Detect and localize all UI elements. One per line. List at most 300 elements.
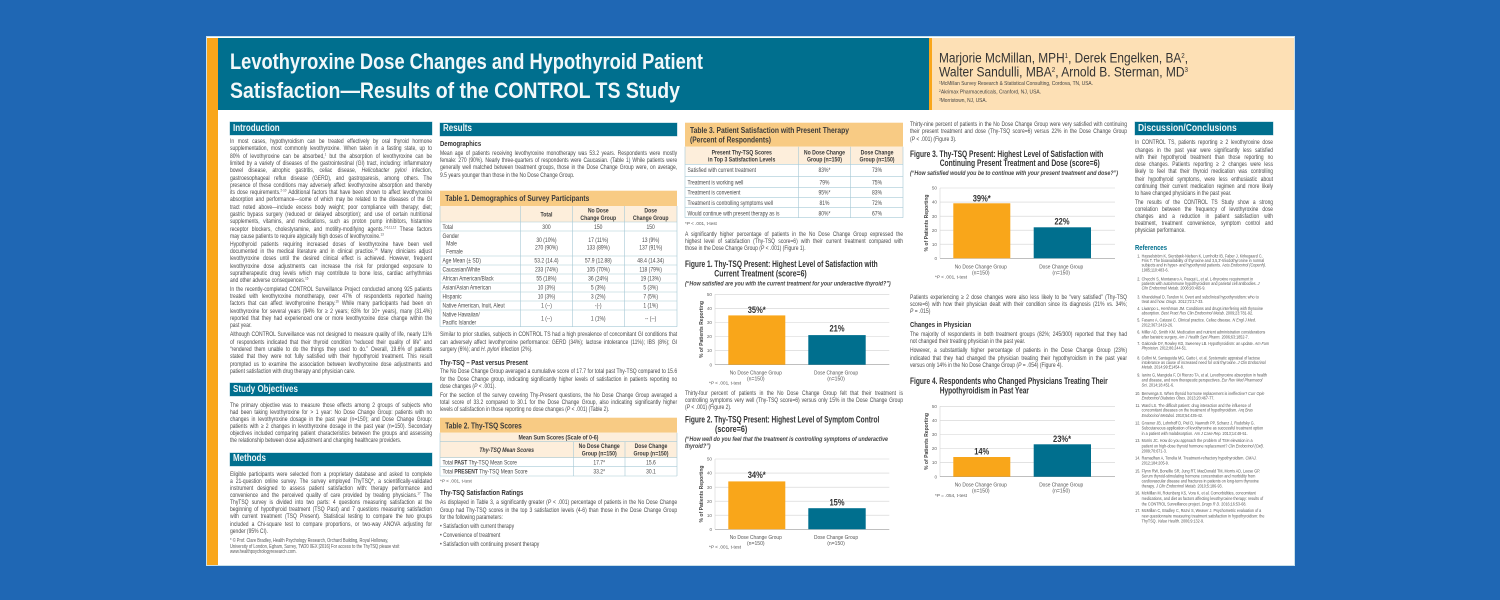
references list: Friis T. The bioavailability of thyroxine and 3,5,3'-triiodothyronine in normal xyxy=(1142,258,1264,263)
text: intro paragraph 1: supplementation, most commonly levothyroxine. When taken in a fasting state, up to xyxy=(230,145,432,152)
references list: 2012;367:2419-26. xyxy=(1142,322,1173,328)
text: intro paragraph 3: factors that can affect levothyroxine therapy.16 While many participants had been on xyxy=(230,300,432,307)
references list: Liwanpo L, Hershman JM. Conditions and drugs interfering with thyroxine xyxy=(1142,306,1264,311)
table 2: Thy-TSQ scores xyxy=(440,418,678,484)
subheading: demographics: Demographics xyxy=(440,139,481,148)
table 1: demographics: Caucasian/White xyxy=(442,267,480,274)
text: satisfaction ratings xyxy=(440,499,677,521)
table 2: Thy-TSQ scores: 30.1 xyxy=(646,469,656,476)
references list: McMillan C, Bradley C, Razvi S, Weaver J. Psychometric evaluation of a xyxy=(1142,508,1262,513)
references list: Miller AD, Smith KM. Medication and nutrient administration considerations xyxy=(1142,329,1265,335)
figure 4: respondents who changed physicians: 0 xyxy=(934,474,937,479)
text: intro paragraph 1: may cause patients to require atypically high doses of levothyroxine.13 xyxy=(230,232,384,240)
authors and affiliations: 3 xyxy=(938,97,940,101)
authors and affiliations: , xyxy=(1184,51,1188,66)
text: present score: For the section of the survey covering Thy-Present questions, the No Dose Change Group averaged a xyxy=(440,392,677,399)
authors and affiliations: 2 xyxy=(1051,67,1055,74)
references list: Khandelwal D, Tandon N. Overt and subclinical hypothyroidism: who to xyxy=(1142,294,1259,300)
text: discussion paragraph 1: to have changed physicians in the past year. xyxy=(1135,190,1231,197)
table 1: demographics: Native Hawaiian/ xyxy=(442,312,480,319)
figure 4: respondents who changed physicians: Hypothyroidism in Past Year xyxy=(940,385,1029,395)
figure 2: highest level of symptom control: 0 xyxy=(709,527,712,532)
references list: 16. xyxy=(1135,490,1140,496)
text: methods: ThyTSQ survey is divided into two parts: 4 questions measuring satisfaction at the xyxy=(230,499,432,506)
text: intro paragraph 1: limited by a variety of diseases of the gastrointestinal (GI) tract, including: inflammatory xyxy=(230,160,432,167)
table 1: demographics: 1 (1%) xyxy=(643,303,658,310)
table 1: demographics: 30 (10%) xyxy=(536,237,557,244)
text: figure 1 lead-in xyxy=(685,231,903,252)
text: past score: for the Dose Change group, indicating significantly higher levels of satisfaction in patients reporting no xyxy=(440,376,677,383)
figure 3: continuing present treatment: No Dose Change Group xyxy=(955,264,1007,270)
header: title banner xyxy=(218,38,928,110)
references list: cardiovascular disease and fractures in patients on long-term thyroxine xyxy=(1142,478,1259,484)
figure 1: highest level of satisfaction: 30 xyxy=(707,320,712,325)
table 1: demographics: Asian/Asian American xyxy=(442,285,491,292)
text: figure 2 lead-in: (P < .001) (Figure 2). xyxy=(685,404,731,411)
text: intro paragraph 1: tract noted above—include excess body weight; poor compliance with therapy; diet; xyxy=(230,204,432,211)
references list: 13. xyxy=(1135,438,1140,443)
text: intro paragraph 3: levothyroxine for several years (94% for ≥ 2 years; 63% for 10+ years), many (31.4%) xyxy=(230,308,432,315)
figure 1: highest level of satisfaction: No Dose Change Group xyxy=(730,371,782,377)
figure 4: respondents who changed physicians: 40 xyxy=(932,418,937,423)
authors and affiliations: , Arnold B. Sterman, MD xyxy=(1055,65,1184,80)
text: demographics xyxy=(440,150,678,179)
subheading: changes in physician: Changes in Physician xyxy=(910,320,971,329)
bullet list: parameters: • Satisfaction with continuing present therapy xyxy=(440,541,539,548)
references list: Fasano A, Catassi C. Clinical practice. Celiac disease. N Engl J Med. xyxy=(1142,317,1256,323)
references list: Cellini M, Santaguida MG, Gatto I, et al. Systematic appraisal of lactose xyxy=(1142,355,1261,361)
text: intro paragraph 3: past year. xyxy=(230,322,252,329)
text: intro paragraph 1: gastric bypass surgery (reduced or delayed absorption); and use of certain nutritional xyxy=(230,211,432,218)
references list: after bariatric surgery. Am J Health Syst Pharm. 2006;63:1852-7. xyxy=(1142,334,1249,340)
text: intro paragraph 4: prompted us to examine the association between levothyroxine dose adjustments and xyxy=(230,361,432,368)
text: discussion paragraph 2: physician performance. xyxy=(1135,227,1186,234)
table 2: Thy-TSQ scores: 15.6 xyxy=(646,460,656,467)
table 3: patient satisfaction: 81% xyxy=(819,201,829,207)
authors and affiliations: 1 xyxy=(938,81,940,85)
authors and affiliations: Morristown, NJ, USA. xyxy=(940,98,986,104)
table 1: demographics xyxy=(440,190,678,327)
text: discussion paragraph 2: The results of the CONTROL TS Study show a strong xyxy=(1135,199,1273,206)
text: discussion paragraph 1: changes in the past year were significantly less satisfied xyxy=(1135,147,1273,154)
table 1: demographics: 105 (70%) xyxy=(587,267,610,274)
text: demographics: Mean age of patients receiving levothyroxine monotherapy was 53.2 years. Respondents were mostly xyxy=(440,150,677,157)
figure 2: highest level of symptom control: Figure 2. Thy-TSQ Present: Highest Level of Symptom Control xyxy=(685,415,879,425)
text: demographics: female: 270 (90%). Nearly three-quarters of respondents were Caucasian. (Table 1) While patients were xyxy=(440,157,677,164)
figure 2: highest level of symptom control: 20 xyxy=(707,499,712,504)
heading: methods xyxy=(230,453,432,466)
text: intro paragraph 1: absorption and performance—some of which may be related to the diseases of the GI xyxy=(230,196,432,203)
text: demographics: generally well matched between treatment groups, those in the Dose Change Group were, on average, xyxy=(440,164,677,171)
footnote: ThyTSQ copyright xyxy=(230,538,400,555)
references list: patients with autoimmune hypothyroidism and parietal cell antibodies. J xyxy=(1142,281,1260,286)
figure 2: highest level of symptom control: *P < .001, t-test xyxy=(709,545,742,550)
heading: discussion/conclusions: Discussion/Conclusions xyxy=(1138,123,1236,134)
figure 3: continuing present treatment: (“How satisfied would you be to continue with your present treatment and dose?”) xyxy=(910,170,1118,177)
text: intro paragraph 2: documented in the medical literature and in clinical practice.14 Many clinicians adjust xyxy=(230,247,432,255)
figure 3: continuing present treatment: 39%* xyxy=(973,193,991,203)
text: physician change difference xyxy=(910,347,1127,369)
text: figure 1 lead-in: those in the Dose Change Group (P < .001) (Figure 1). xyxy=(685,245,806,252)
figure 1: highest level of satisfaction xyxy=(685,259,891,386)
references list: 12. xyxy=(1135,420,1140,426)
table 2: Thy-TSQ scores: 17.7* xyxy=(593,460,606,467)
references list: Morris JC. How do you approach the problem of TSH elevation in a xyxy=(1142,438,1253,443)
figure 1: highest level of satisfaction: 10 xyxy=(707,348,712,353)
table 3: patient satisfaction: *P < .001, t-test xyxy=(685,221,718,226)
text: intro paragraph 3: In the recently-completed CONTROL Surveillance Project conducted among 925 patients xyxy=(230,286,432,293)
heading: study objectives xyxy=(230,383,432,396)
references list xyxy=(1135,243,1269,524)
authors and affiliations: 1 xyxy=(1064,53,1068,60)
table 2: Thy-TSQ scores: Total PAST Thy-TSQ Mean Score xyxy=(442,460,517,467)
table 3: patient satisfaction: 80%* xyxy=(819,211,831,218)
table 1: demographics: 36 (24%) xyxy=(588,276,608,283)
text: objectives: changes in levothyroxine dosage in the past year (n=150); and Dose Change Group: xyxy=(230,416,432,423)
text: concomitant conditions: Similar to prior studies, subjects in CONTROL TS had a high prevalence of concomitant GI conditions that xyxy=(440,331,677,338)
table 3: patient satisfaction: in Top 3 Satisfaction Levels xyxy=(708,157,776,164)
text: figure 3 lead-in: their present treatment and dose (Thy-TSQ score=6) versus 22% in the Dose Change Group xyxy=(910,128,1127,135)
subheading: satisfaction ratings: Thy-TSQ Satisfaction Ratings xyxy=(440,488,523,497)
table 1: demographics: 1 (1%) xyxy=(591,316,606,323)
authors and affiliations: 3 xyxy=(1184,67,1188,74)
authors and affiliations: 2 xyxy=(1181,53,1184,60)
text: intro paragraph 3: treated with levothyroxine monotherapy, over 47% of respondents reported having xyxy=(230,293,432,300)
text: intro paragraph 2: supratherapeutic drug levels which may contribute to bone loss, cardiac arrhythmias xyxy=(230,270,432,277)
figure 2: highest level of symptom control: (“How well do you feel that the treatment is controlling symptoms of underactive xyxy=(685,436,888,443)
title xyxy=(230,49,703,103)
table 1: demographics: Change Group xyxy=(580,215,616,222)
text: physician satisfaction: Patients experiencing ≥ 2 dose changes were also less likely to be “very satisfied” (Thy-TSQ xyxy=(910,294,1127,301)
figure 3: continuing present treatment: 20 xyxy=(932,228,937,233)
figure 2: highest level of symptom control: % of Patients Reporting xyxy=(699,465,705,522)
authors and affiliations xyxy=(938,51,1188,104)
references list: 3. xyxy=(1137,294,1140,300)
table 1: demographics: 10 (3%) xyxy=(538,285,555,292)
table 1: demographics: 5 (3%) xyxy=(591,285,606,292)
text: physician change difference: However, a substantially higher percentage of patients in the Dose Change Group (23%) xyxy=(910,347,1127,354)
heading: results: Results xyxy=(443,123,471,134)
figure 4: respondents who changed physicians: Dose Change Group xyxy=(1039,482,1083,488)
table 1: demographics: Age Mean (± SD) xyxy=(442,258,481,265)
references list: 6. xyxy=(1137,329,1140,335)
table 1: demographics: Hispanic xyxy=(442,294,462,301)
figure 2: highest level of symptom control: Dose Change Group xyxy=(814,535,858,541)
references list: ThyTSQ. Value Health. 2006;9:132-9. xyxy=(1142,518,1204,524)
table 1: demographics: African American/Black xyxy=(442,276,494,283)
authors and affiliations: Marjorie McMillan, MPH xyxy=(938,51,1081,66)
text: discussion paragraph 1: continuing their current medication regimen and more likely xyxy=(1135,183,1273,190)
references list: in a patient with malabsorption. Am J Case Rep. 2013;14:48-51. xyxy=(1142,431,1248,436)
table 1: demographics: 19 (13%) xyxy=(641,276,661,283)
text: intro paragraph 2: levothyroxine dose adjustments can increase the risk for prolonged exposure to xyxy=(230,263,432,270)
table 1: demographics: 3 (2%) xyxy=(591,294,606,301)
table 1: demographics: Dose xyxy=(644,208,658,215)
table 1: demographics: 55 (18%) xyxy=(536,276,557,283)
references list: medications, and diet as factors affecting levothyroxine therapy: results of xyxy=(1142,496,1264,501)
figure 2: highest level of symptom control: 50 xyxy=(707,457,712,462)
text: intro paragraph 4: Although CONTROL Surveillance was not designed to measure quality of life, nearly 11% xyxy=(230,331,432,338)
references list: 4. xyxy=(1137,306,1140,311)
table 1: demographics: 7 (5%) xyxy=(643,294,658,301)
figure 1: highest level of satisfaction: Dose Change Group xyxy=(814,371,858,377)
table 1: demographics: 1 (--) xyxy=(541,316,552,323)
figure 2: highest level of symptom control: (n=150) xyxy=(827,541,845,547)
references list: 9. xyxy=(1137,372,1140,378)
text: intro paragraph 1: gastroesophageal reflux disease (GERD), and gastroparesis, among others. The xyxy=(230,175,432,182)
figure 3: continuing present treatment: 40 xyxy=(932,200,937,205)
table 1: demographics: 270 (90%) xyxy=(535,245,558,252)
text: figure 3 lead-in xyxy=(910,121,1127,143)
footnote: ThyTSQ copyright: www.healthpsychologyresearch.com. xyxy=(230,549,297,555)
table 1: demographics: 13 (9%) xyxy=(642,237,659,244)
figure 2: highest level of symptom control xyxy=(685,415,890,550)
references list: Endocrinol Metabol. 2010;54:435-42. xyxy=(1142,413,1203,418)
heading: introduction: Introduction xyxy=(233,123,279,134)
references list: 17. xyxy=(1135,508,1140,513)
authors and affiliations: Akrimax Pharmaceuticals, Cranford, NJ, USA. xyxy=(940,90,1040,96)
references list: Groener JB, Lohnhoff D, Piel D, Nawroth PP, Schanz J, Rudofsky G. xyxy=(1142,420,1255,426)
table 1: demographics: 150 xyxy=(647,225,655,231)
text: present score: levels of satisfaction in those reporting no dose changes (P < .001) (Table 2). xyxy=(440,406,609,413)
table 1: demographics: 300 xyxy=(542,225,551,231)
table 3: patient satisfaction: 95%* xyxy=(819,190,831,197)
figure 3: continuing present treatment: 22% xyxy=(1054,216,1070,226)
references list: 1. xyxy=(1137,253,1140,259)
text: discussion paragraph 1: their hypothyroid symptoms, were less enthusiastic about xyxy=(1135,176,1273,183)
text: intro paragraph 2: Hypothyroid patients requiring increased doses of levothyroxine have been well xyxy=(230,241,432,248)
figure 1: highest level of satisfaction: 35%* xyxy=(748,305,766,315)
text: concomitant conditions xyxy=(440,331,678,353)
figure 4: respondents who changed physicians: % of Patients Reporting xyxy=(924,413,930,470)
figure 3: continuing present treatment: Continuing Present Treatment and Dose (score=6) xyxy=(940,158,1100,168)
authors and affiliations: Walter Sandulli, MBA xyxy=(938,65,1065,80)
figure 2: highest level of symptom control: 40 xyxy=(707,471,712,476)
references list: Flynn RW, Bonellie SR, Jung RT, MacDonald TM, Morris AD, Leese GP. xyxy=(1142,468,1260,474)
text: figure 1 lead-in: highest level of satisfaction (Thy-TSQ score=6) with their current treatment compared with xyxy=(685,238,903,245)
header: authors panel xyxy=(928,38,1294,110)
table 3: patient satisfaction: Table 3. Patient Satisfaction with Present Therapy xyxy=(690,125,849,135)
references list: 10. xyxy=(1135,391,1140,396)
authors and affiliations: 2 xyxy=(938,89,940,93)
figure 4: respondents who changed physicians: 10 xyxy=(932,460,937,465)
figure 2: highest level of symptom control: 10 xyxy=(707,513,712,518)
figure 1: highest level of satisfaction: (n=150) xyxy=(747,377,765,383)
figure 1: highest level of satisfaction: (n=150) xyxy=(827,377,845,383)
heading: methods: Methods xyxy=(233,453,265,464)
text: figure 2 lead-in: controlling symptoms very well (Thy-TSQ score=6) versus only 15% in the Dose Change Group xyxy=(685,397,903,404)
text: objectives: The primary objective was to measure those effects among 2 groups of subjects who xyxy=(230,402,432,409)
references list: 1985;110:483-6. xyxy=(1142,267,1169,273)
text: physician majority: not changed their treating physician in the past year. xyxy=(910,338,1025,345)
figure 1: highest level of satisfaction: 20 xyxy=(707,334,712,339)
text: intro paragraph 3: reported that they had experienced one or more levothyroxine dose change within the xyxy=(230,315,432,322)
figure 1: highest level of satisfaction: Figure 1. Thy-TSQ Present: Highest Level of Satisfaction with xyxy=(685,259,878,269)
references list: Sci. 2014;18:451-6. xyxy=(1142,382,1174,388)
figure 4: respondents who changed physicians: Figure 4. Respondents who Changed Physicians Treating Their xyxy=(910,376,1108,386)
figure 4: respondents who changed physicians: *P = .054, t-test xyxy=(935,493,968,498)
text: physician majority xyxy=(910,331,1127,345)
table 3: patient satisfaction: Group (n=150) xyxy=(807,157,842,164)
table 2: Thy-TSQ scores: Thy-TSQ Mean Scores xyxy=(479,447,535,454)
text: objectives: patients with ≥ 2 changes in levothyroxine dosage in the past year (n=150). Secondary xyxy=(230,423,432,430)
table 1: demographics: Gender xyxy=(442,234,459,240)
references list: Ramadhan A, Tonelia M. Treatment-refractory hypothyroidism. CMAJ. xyxy=(1142,455,1257,461)
figure 3: continuing present treatment: (n=150) xyxy=(1052,270,1070,276)
figure 3: continuing present treatment xyxy=(910,149,1118,280)
figure 2: highest level of symptom control: 34%* xyxy=(748,470,766,480)
text: objectives xyxy=(230,402,432,444)
panel: table 3 and figures 1-2 column xyxy=(684,122,904,550)
references list: 11. xyxy=(1135,403,1140,408)
figure 3: continuing present treatment: *P < .001, t-test xyxy=(935,275,968,280)
figure 4: respondents who changed physicians: 30 xyxy=(932,432,937,437)
table 3: patient satisfaction: 72% xyxy=(872,201,882,207)
references list: 5. xyxy=(1137,317,1140,323)
figure 4: respondents who changed physicians: (n=150) xyxy=(1052,488,1070,494)
table 1: demographics: No Dose xyxy=(588,208,609,215)
references list: Ianiro G, Mangiola F, Di Rienzo TA, et al. Levothyroxine absorption in health xyxy=(1142,372,1268,378)
bullet list: parameters: • Satisfaction with current therapy xyxy=(440,523,514,530)
table 2: Thy-TSQ scores: *P < .001, t-test xyxy=(440,479,473,484)
figure 4: respondents who changed physicians: 20 xyxy=(932,446,937,451)
table 1: demographics: -- (--) xyxy=(645,316,656,323)
panel: study objectives xyxy=(230,382,432,444)
text: demographics: 9.5 years younger than those in the No Dose Change Group. xyxy=(440,172,574,179)
text: intro paragraph 1: presence of these conditions may adversely affect levothyroxine absorption and thereby xyxy=(230,182,432,189)
text: methods: Eligible participants were selected from a proprietary database and asked to complete xyxy=(230,471,432,478)
table 1: demographics: 133 (89%) xyxy=(587,245,610,252)
heading: study objectives: Study Objectives xyxy=(233,384,298,395)
figure 4: respondents who changed physicians: 50 xyxy=(932,404,937,409)
table 1: demographics: Native American, Inuit, Aleut xyxy=(442,303,505,310)
text: objectives: the relationship between dose adjustment and changing healthcare providers. xyxy=(230,437,401,444)
text: satisfaction ratings: As displayed in Table 3, a significantly greater (P < .001) percentage of patients in the No Dose Change xyxy=(440,499,677,506)
references list: 7. xyxy=(1137,341,1140,346)
table 2: Thy-TSQ scores: 33.2* xyxy=(593,469,606,476)
text: intro paragraph 1: its dose requirements.2-10 Additional factors that have been shown to affect levothyroxine xyxy=(230,189,432,196)
references list: Gaitonde DY, Rowley KD, Sweeney LB. Hypothyroidism: an update. Am Fam xyxy=(1142,341,1269,346)
figure 3: continuing present treatment: 30 xyxy=(932,214,937,219)
text: present score: total score of 33.2 compared to 30.1 for the Dose Change Group, also indicating significantly higher xyxy=(440,399,677,406)
text: intro paragraph 1: 80% of levothyroxine can be absorbed,1 but the absorption of levothyroxine can be xyxy=(230,152,432,160)
text: discussion paragraph 1: In CONTROL TS, patients reporting ≥ 2 levothyroxine dose xyxy=(1135,139,1273,146)
text: physician majority: The majority of respondents in both treatment groups (82%; 245/300) reported that they had xyxy=(910,331,1127,338)
references list: 14. xyxy=(1135,455,1140,461)
text: methods: beginning of hypothyroid treatment (TSQ Past) and 7 questions measuring satisfaction xyxy=(230,506,432,513)
text: concomitant conditions: can adversely affect levothyroxine performance: GERD (34%); lactose intolerance (11%); IBS (8%); GI xyxy=(440,339,677,346)
text: physician satisfaction: score=6) with how their physician dealt with their condition since its diagnosis (21% vs. 34%; xyxy=(910,301,1127,308)
text: methods xyxy=(230,471,432,535)
references list: Benvenga S. When thyroid hormone replacement is ineffective? Curr Opin xyxy=(1142,391,1265,396)
figure 3: continuing present treatment: 50 xyxy=(932,186,937,191)
text: intro paragraph 4: patient satisfaction with drug therapy and physician care. xyxy=(230,368,355,375)
text: intro paragraph 4: of respondents indicated that their thyroid condition “reduced their quality of life” and xyxy=(230,339,432,346)
text: intro paragraph 4: “rendered them unable to do the things they used to do.” Overall, 19.6% of patients xyxy=(230,346,432,353)
text: methods: instrument designed to assess patient satisfaction with: therapy performance and xyxy=(230,485,432,492)
orange side strip xyxy=(207,38,218,565)
references list: treat and how. Drugs. 2012;72:17-33. xyxy=(1142,299,1203,304)
figure 3: continuing present treatment: (n=150) xyxy=(972,270,990,276)
text: methods: convenience and the perceived quality of care provided by treating physicians.17 The xyxy=(230,491,432,499)
figure 3: continuing present treatment: Dose Change Group xyxy=(1039,264,1083,270)
table 3: patient satisfaction: Group (n=150) xyxy=(860,157,895,164)
text: intro paragraph 1: supplements, vitamins, and medications, such as proton pump inhibitors, histamine xyxy=(230,218,432,225)
references list: Checchi S, Montanaro A, Pasqui L, et al. L-thyroxine requirement in xyxy=(1142,276,1254,282)
table 3: patient satisfaction: Treatment is convenient xyxy=(687,190,741,197)
table 1: demographics: Table 1. Demographics of Survey Participants xyxy=(445,193,589,203)
authors and affiliations: McMillan Survey Research & Statistical Consulting, Cordova, TN, USA. xyxy=(940,81,1092,87)
references list: Subcutaneous application of levothyroxine as successful treatment option xyxy=(1142,425,1264,431)
table 2: Thy-TSQ scores: Mean Sum Scores (Scale of 0-6) xyxy=(519,434,598,442)
footnote: ThyTSQ copyright: University of London, Egham, Surrey, TW20 0EX [2016] For access to the ThyTSQ please visit xyxy=(230,544,399,550)
references list: 15. xyxy=(1135,468,1140,474)
references list: intolerance as cause of increased need for oral thyroxine. J Clin Endocrinol xyxy=(1142,360,1267,365)
table 3: patient satisfaction: Would continue with present therapy as is xyxy=(687,211,780,218)
references list: subjects and in hyper- and hypothyroid patients. Acta Endocrinol (Copenh). xyxy=(1142,262,1266,268)
figure 3: continuing present treatment: Figure 3. Thy-TSQ Present: Highest Level of Satisfaction with xyxy=(910,149,1103,159)
table 3: patient satisfaction: 83% xyxy=(872,190,882,197)
figure 1: highest level of satisfaction: (“How satisfied are you with the current treatment for your underactive thyroid?”) xyxy=(685,280,891,288)
panel: introduction xyxy=(230,122,432,375)
bullet list: parameters: • Convenience of treatment xyxy=(440,532,500,539)
poster sheet xyxy=(206,37,1294,565)
table 2: Thy-TSQ scores: Table 2. Thy-TSQ Scores xyxy=(445,421,522,431)
table 1: demographics: -(-) xyxy=(595,303,602,310)
text: discussion paragraph 1: with their hypothyroid treatment than those reporting no xyxy=(1135,154,1273,161)
figure 2: highest level of symptom control: thyroid?”) xyxy=(685,443,710,450)
text: objectives: objectives included comparing patient characteristics between the groups and assessing xyxy=(230,430,432,437)
text: objectives: had been taking levothyroxine for > 1 year: No Dose Change Group: patients with no xyxy=(230,409,432,416)
figure 1: highest level of satisfaction: Current Treatment (score=6) xyxy=(714,268,807,278)
table 2: Thy-TSQ scores: Group (n=150) xyxy=(634,451,668,458)
figure 3: continuing present treatment: % of Patients Reporting xyxy=(924,194,930,252)
references list: Hasselström K, Siersbæk-Nielsen K, Lumholtz IB, Faber J, Kirkegaard C, xyxy=(1142,253,1263,259)
text: methods: gender (95% CI). xyxy=(230,528,268,535)
references list: new questionnaire measuring treatment satisfaction in hypothyroidism: the xyxy=(1142,513,1265,519)
table 1: demographics: 57.9 (12.88) xyxy=(585,258,612,265)
text: past score: dose changes (P < .001). xyxy=(440,383,496,390)
authors and affiliations: , Derek Engelken, BA xyxy=(1068,51,1181,66)
references list: concomitant diseases on the treatment of hypothyroidism. Arq Bras xyxy=(1142,407,1254,413)
references list: 2. xyxy=(1137,276,1140,282)
text: physician change difference: versus only 14% in the No Dose Change Group (P = .054) (Figure 4). xyxy=(910,362,1063,369)
figure 2: highest level of symptom control: 30 xyxy=(707,485,712,490)
title: Satisfaction—Results of the CONTROL TS Study xyxy=(230,78,680,103)
table 1: demographics: 10 (3%) xyxy=(538,294,555,301)
text: satisfaction ratings: Group had Thy-TSQ scores in the top 3 satisfaction levels (4-6) than those in the Dose Change Group xyxy=(440,507,677,514)
table 1: demographics: 53.2 (14.4) xyxy=(534,258,559,265)
text: figure 3 lead-in: Thirty-nine percent of patients in the No Dose Change Group were very satisfied with continuing xyxy=(910,121,1127,128)
text: intro paragraph 1 xyxy=(230,138,432,240)
text: present score xyxy=(440,392,678,413)
text: past score xyxy=(440,368,677,390)
text: discussion paragraph 1: dose changes. Patients reporting ≥ 2 changes were less xyxy=(1135,161,1273,168)
figure 2: highest level of symptom control: No Dose Change Group xyxy=(730,535,782,541)
references list: McMillan M, Rotenberg KS, Vora K, et al. Comorbidities, concomitant xyxy=(1142,490,1256,496)
table 1: demographics: Total xyxy=(442,225,453,231)
references list: Physician. 2012;86:244-51. xyxy=(1142,345,1187,351)
table 3: patient satisfaction: Treatment is working well xyxy=(687,180,743,187)
table 1: demographics: 1 (--) xyxy=(541,303,552,310)
references list: therapy. J Clin Endocrinol Metab. 2010;5:186-93. xyxy=(1142,483,1223,489)
table 3: patient satisfaction: No Dose Change xyxy=(804,150,846,157)
figure 4: respondents who changed physicians: (n=150) xyxy=(972,488,990,494)
table 1: demographics: 48.4 (14.34) xyxy=(637,258,664,265)
table 3: patient satisfaction: Satisfied with current treatment xyxy=(687,168,756,174)
figure 2: highest level of symptom control: (n=150) xyxy=(747,541,765,547)
table 3: patient satisfaction: Present Thy-TSQ Scores xyxy=(712,150,772,157)
